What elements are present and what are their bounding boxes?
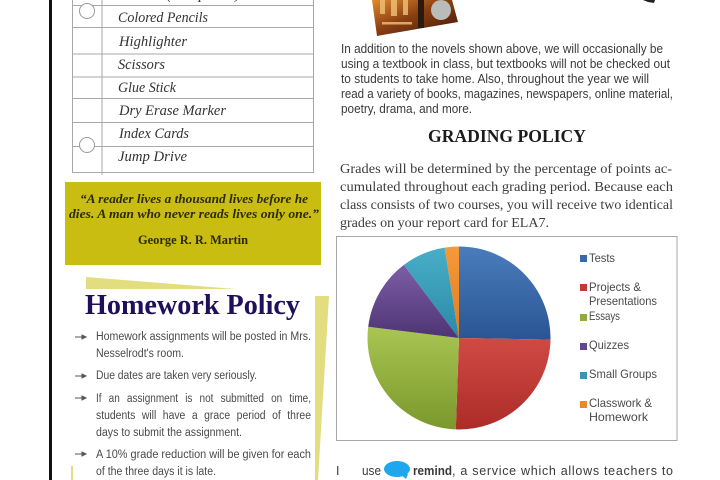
supply list items: Index Cards [118,126,189,142]
heading: Grading Policy: GRADING POLICY [428,126,586,146]
book cover image [372,0,458,36]
text block: remind line: use [362,464,381,478]
chart legend [580,251,657,424]
panel: quote box: George R. R. Martin [138,233,248,247]
chart legend: Small Groups [589,367,657,381]
chart legend: Homework [589,410,649,424]
bullet text: Due dates are taken very seriously. [96,370,257,382]
bullet text [96,331,311,478]
panel: homework policy bullets [75,331,311,478]
panel: pie chart [336,236,677,440]
chart legend: Presentations [589,294,657,308]
icon: binder hole bottom [80,138,94,152]
pie chart slices [368,246,551,429]
supply list items: Scissors [118,57,165,73]
supply list items: Highlighter [118,34,187,50]
supply list items: Dry Erase Marker [118,103,226,119]
supply list items: Jump Drive [118,149,187,165]
bullet text: A 10% grade reduction will be given for each [96,449,311,461]
text block: grading paragraph [340,162,673,231]
icon: binder hole top [80,4,94,18]
text block: grading paragraph: cumulated throughout each grading period. Because each [340,180,673,195]
panel: quote box: “A reader lives a thousand lives before he [80,192,308,206]
bullet text: If an assignment is not submitted on time, [96,393,311,405]
text block: novels paragraph: to students to take home. Also, throughout the year we will [341,72,649,86]
text block: grading paragraph: Grades will be determined by the percentage of points ac- [340,162,672,177]
text block: remind line [336,461,673,479]
supply list items: Glue Stick [118,80,176,96]
chart legend: Projects & [589,280,641,294]
panel: quote box: dies. A man who never reads lives only one.” [69,207,320,221]
text block: grading paragraph: class consists of two courses, you will receive two identical [340,198,673,213]
text block: novels paragraph: In addition to the novels shown above, we will occasionally be [341,42,663,56]
text block: novels paragraph [341,42,673,116]
bullet text: days to submit the assignment. [96,427,242,439]
icon fragment top right [643,0,655,3]
text block: novels paragraph: using a textbook in class, but textbooks will not be checked out [341,57,670,71]
icon: remind speech bubble [384,461,410,479]
panel: supply list table [72,0,314,175]
chart legend: Essays [589,309,620,323]
text block: novels paragraph: read a variety of books, magazines, newspapers, online material, [341,87,673,101]
page left border bar [49,0,52,480]
text block: remind line: remind [413,464,452,478]
text block: grading paragraph: grades on your report card for ELA7. [340,216,549,231]
heading: Homework Policy: Homework Policy [85,289,300,321]
supply list items: Colored Pencils [118,10,208,26]
text block: novels paragraph: poetry, drama, and more. [341,102,472,116]
bullet text: students will have a grace period of three [96,410,311,422]
chart legend: Classwork & [589,396,652,410]
icon: bullet arrows [75,335,86,456]
decorative frame: homework policy accents [71,277,329,480]
text block: remind line: I [336,464,339,478]
text block: remind line: , a service which allows teachers to [452,464,673,478]
bullet text: Homework assignments will be posted in Mrs. [96,331,311,343]
chart legend: Tests [589,251,615,265]
chart legend: Quizzes [589,338,629,352]
panel: quote box [65,182,321,265]
bullet text: of the three days it is late. [96,466,216,478]
bullet text: Nesselrodt's room. [96,348,184,360]
supply list items [117,0,240,165]
